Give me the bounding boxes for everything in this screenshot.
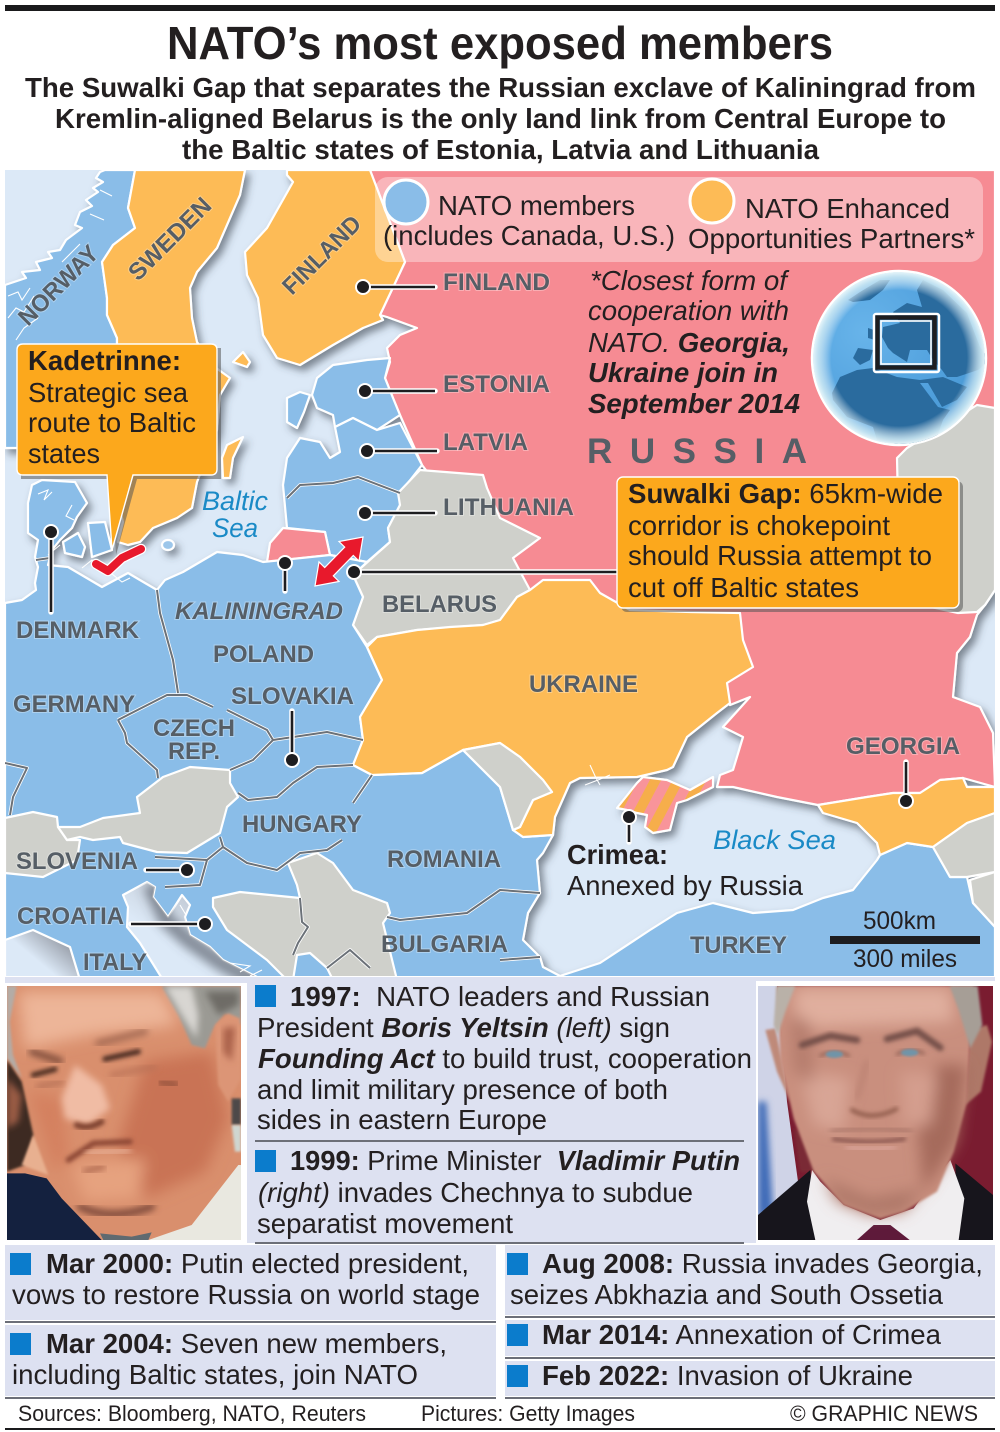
- Yeltsin facial features: [32, 1032, 175, 1214]
- photo: Vladimir Putin: [756, 981, 1000, 1243]
- Georgia: [818, 778, 995, 855]
- bottom rule: [5, 1428, 995, 1430]
- globe: locator square: [874, 314, 939, 372]
- grey eastern state: [897, 405, 995, 613]
- country labels: ITALY: [83, 949, 147, 976]
- Putin hair: [774, 986, 795, 1035]
- timeline: 1997: and limit military presence of both: [257, 1074, 668, 1105]
- Putin blue and white flag: [758, 986, 800, 1218]
- callout: Crimea: Annexed by Russia: [567, 870, 804, 901]
- timeline: 1999: (right) invades Chechnya to subdue: [258, 1177, 693, 1208]
- subtitle: The Suwalki Gap that separates the Russian exclave of Kaliningrad from: [25, 72, 976, 103]
- Kadetrinne red route: [96, 549, 141, 571]
- Putin shirt: [807, 1160, 964, 1240]
- country labels: SWEDEN: [123, 192, 217, 286]
- footnote text: Ukraine join in: [588, 357, 778, 388]
- footnote text: September 2014: [588, 388, 800, 419]
- Russia: [370, 170, 995, 805]
- country labels: CZECH: [153, 715, 235, 742]
- western Italian sea: [5, 930, 80, 980]
- callout: Suwalki Gap: [617, 477, 963, 612]
- Yeltsin coat and shirt: [7, 1173, 102, 1240]
- Crimea: [617, 777, 713, 833]
- Adriatic coastal shading: [150, 885, 262, 984]
- country labels: ROMANIA: [387, 846, 501, 873]
- Estonia: [312, 358, 400, 430]
- Putin ears: [765, 1028, 790, 1102]
- Belarus: [353, 470, 540, 645]
- footer credits: Pictures: Getty Images: [421, 1401, 635, 1426]
- top rule: [5, 5, 995, 11]
- scale bar: [830, 907, 980, 973]
- country labels: POLAND: [213, 641, 314, 668]
- legend: NATO Enhanced Opportunities Partners: Opportunities Partners*: [688, 223, 975, 254]
- callout: Suwalki Gap: cut off Baltic states: [628, 572, 859, 603]
- country labels: FINLAND: [443, 269, 550, 296]
- Russia label: RUSSIA: [587, 432, 807, 471]
- Sweden: [102, 170, 245, 545]
- timeline: Aug 2008: [507, 1248, 983, 1310]
- Yeltsin left background: [7, 1060, 33, 1172]
- legend: NATO Enhanced Opportunities Partners: NATO Enhanced: [745, 193, 950, 224]
- country labels: LATVIA: [443, 429, 528, 456]
- callout: Kadetrinne: Strategic sea: [28, 377, 189, 408]
- timeline: Mar 2000: [10, 1248, 480, 1310]
- country labels: DENMARK: [16, 617, 140, 644]
- globe: Eurasia: [882, 280, 990, 377]
- photo: Boris Yeltsin: [3, 983, 247, 1245]
- Austria: [58, 767, 238, 853]
- timeline: 1999: 1999: Prime Minister Vladimir Putin: [290, 1145, 740, 1176]
- callout: Kadetrinne: states: [28, 438, 100, 469]
- timeline: 1999: [255, 1145, 740, 1239]
- Putin facial features: [802, 1031, 940, 1149]
- country labels: REP.: [168, 738, 220, 765]
- Yeltsin nose: [62, 1065, 110, 1125]
- scale bar: 300 miles: [853, 945, 957, 973]
- subtitle: Kremlin-aligned Belarus is the only land link from Central Europe to: [55, 103, 946, 134]
- country labels: KALININGRAD: [175, 598, 343, 625]
- leader lines: [44, 280, 913, 931]
- timeline: 1999: separatist movement: [257, 1208, 513, 1239]
- callout: Suwalki Gap: Suwalki Gap: 65km-wide: [628, 478, 943, 509]
- callout: Kadetrinne: Kadetrinne:: [28, 345, 181, 376]
- timeline: Aug 2008: Aug 2008: Russia invades Georgia,: [542, 1248, 983, 1279]
- callout: Crimea: Crimea:: [567, 839, 668, 870]
- sea background: [5, 170, 995, 976]
- Norway: [5, 170, 135, 448]
- footnote text: cooperation with: [588, 295, 789, 326]
- country labels: UKRAINE: [529, 671, 638, 698]
- timeline: Feb 2022: Feb 2022: Invasion of Ukraine: [542, 1360, 913, 1391]
- country labels: NORWAY: [13, 240, 104, 331]
- Bosnia and Serbia: [213, 853, 397, 980]
- sea labels: Sea: [212, 513, 258, 543]
- title: NATO’s most exposed members: [167, 17, 833, 69]
- Finland: [245, 170, 405, 365]
- globe: Africa and Arabia: [832, 368, 967, 447]
- country labels: SLOVENIA: [16, 848, 138, 875]
- timeline: Mar 2004: [10, 1328, 447, 1390]
- land masses: [5, 170, 995, 980]
- timeline: Mar 2000: vows to restore Russia on world stage: [12, 1279, 480, 1310]
- legend: NATO members: (includes Canada, U.S.): [383, 220, 675, 251]
- Switzerland: [5, 812, 80, 877]
- country labels: HUNGARY: [242, 811, 362, 838]
- country labels: CROATIA: [17, 903, 124, 930]
- legend: NATO Enhanced Opportunities Partners: [688, 179, 975, 254]
- timeline: Mar 2004: including Baltic states, join NATO: [12, 1359, 418, 1390]
- callout: Kadetrinne: route to Baltic: [28, 407, 196, 438]
- country borders: [5, 477, 540, 968]
- timeline: Mar 2014: Mar 2014: Annexation of Crimea: [542, 1319, 942, 1350]
- timeline background panels: [5, 977, 995, 1399]
- white coast details: [8, 190, 610, 976]
- timeline: 1997: [255, 981, 752, 1135]
- timeline: Mar 2004: Mar 2004: Seven new members,: [46, 1328, 447, 1359]
- country labels: SLOVAKIA: [231, 683, 354, 710]
- country labels: [13, 192, 960, 976]
- Kaliningrad: [267, 528, 330, 562]
- timeline: 1997: President Boris Yeltsin (left) sign: [257, 1012, 670, 1043]
- callout: Suwalki Gap: should Russia attempt to: [628, 540, 932, 571]
- callout: Crimea: [567, 839, 804, 901]
- Putin jacket: [758, 1170, 815, 1240]
- timeline: Mar 2000: Mar 2000: Putin elected president,: [46, 1248, 469, 1279]
- Montenegro: [293, 953, 333, 980]
- Yeltsin skin tones: [18, 992, 228, 1202]
- sea labels: Baltic: [202, 486, 268, 516]
- Latvia and Lithuania: [283, 418, 422, 562]
- country labels: FINLAND: [277, 210, 367, 300]
- sea labels: [202, 486, 836, 855]
- country labels: TURKEY: [690, 932, 787, 959]
- map panel: [5, 170, 995, 984]
- Moldova: [463, 743, 552, 830]
- locator globe: [812, 271, 990, 447]
- timeline: 1997: 1997: NATO leaders and Russian: [290, 981, 710, 1012]
- globe: Iberia and Britain: [853, 328, 875, 365]
- subtitle: [25, 72, 976, 165]
- legend: NATO members: NATO members: [438, 190, 635, 221]
- footer credits: Sources: Bloomberg, NATO, Reuters: [18, 1401, 366, 1426]
- country labels: ESTONIA: [443, 371, 550, 398]
- footnote text: [588, 265, 800, 419]
- country labels: LITHUANIA: [443, 494, 574, 521]
- subtitle: the Baltic states of Estonia, Latvia and Lithuania: [182, 134, 820, 165]
- country labels: BULGARIA: [381, 931, 508, 958]
- legend: NATO members: [383, 180, 675, 251]
- callout: Suwalki Gap: corridor is chokepoint: [628, 510, 890, 541]
- sea labels: Black Sea: [713, 825, 836, 855]
- Ukraine: [353, 580, 753, 837]
- Caucasus grey states: [933, 813, 995, 877]
- Yeltsin hair: [162, 986, 241, 1048]
- callout: Kadetrinne: [17, 344, 221, 555]
- country labels: GERMANY: [13, 691, 135, 718]
- footnote text: NATO. Georgia,: [588, 327, 790, 358]
- Suwalki Gap double arrow: [315, 537, 363, 586]
- scale bar: 500km: [863, 907, 936, 935]
- timeline: 1997: Founding Act to build trust, cooperation: [258, 1043, 752, 1074]
- Yeltsin ear: [215, 1013, 241, 1102]
- timeline: Aug 2008: seizes Abkhazia and South Ossetia: [510, 1279, 944, 1310]
- footnote text: *Closest form of: [590, 265, 790, 296]
- footer credits: [18, 1401, 978, 1426]
- Adriatic Sea: [123, 882, 263, 980]
- country labels: BELARUS: [382, 591, 497, 618]
- central Europe and Turkey: [5, 480, 995, 980]
- country labels: GEORGIA: [846, 733, 960, 760]
- globe: Arctic land: [848, 280, 890, 302]
- timeline: 1997: sides in eastern Europe: [257, 1104, 547, 1135]
- legend panel: [375, 177, 983, 262]
- Putin tie: [857, 1225, 910, 1240]
- Putin face: [777, 986, 974, 1218]
- footer credits: © GRAPHIC NEWS: [790, 1401, 978, 1426]
